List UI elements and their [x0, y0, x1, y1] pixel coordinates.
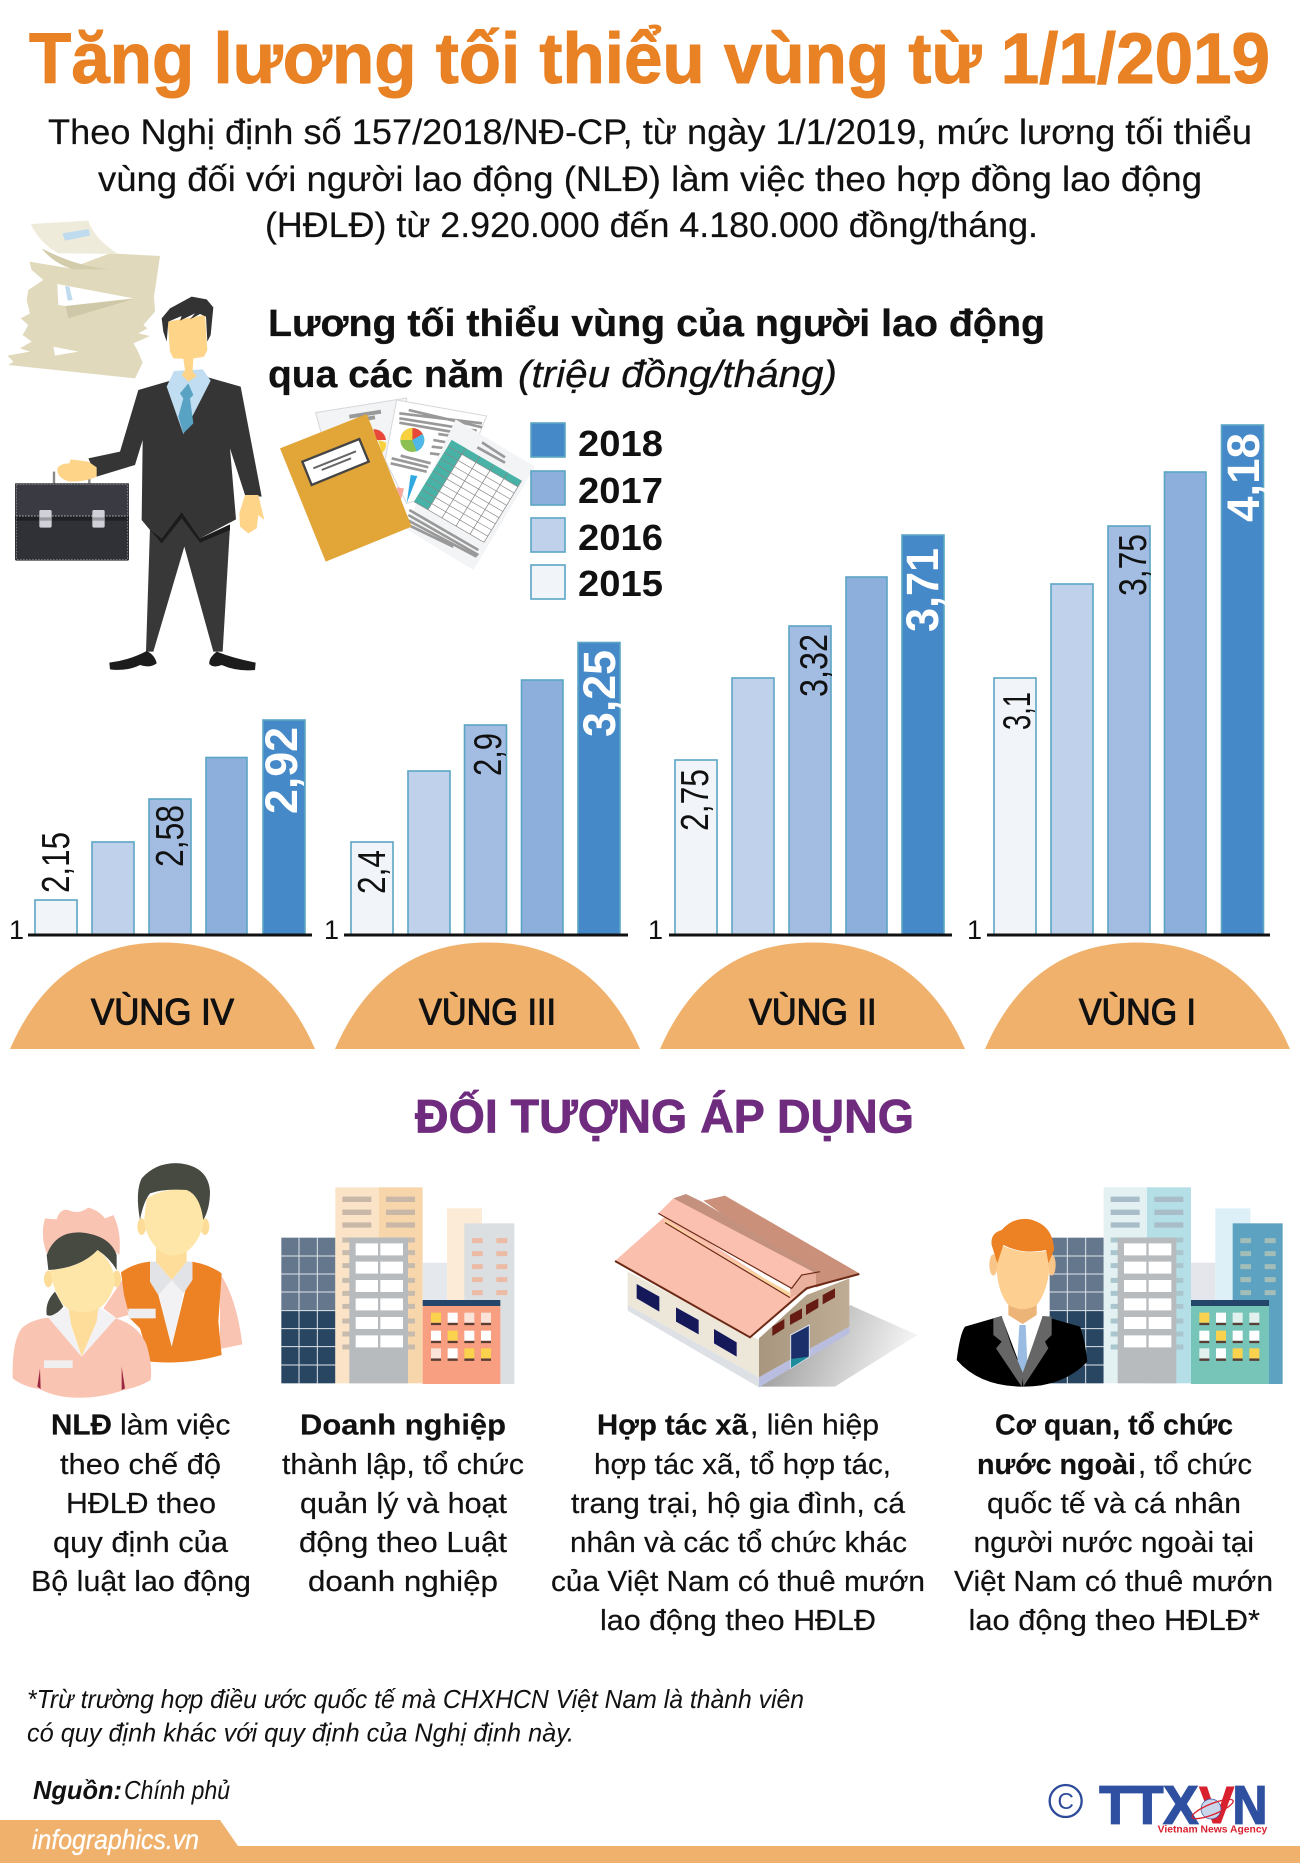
region dome: Vùng I [985, 942, 1290, 1049]
buildings [1050, 1187, 1283, 1384]
icon: foreign businessman and buildings [957, 1187, 1283, 1387]
bar chart: Vùng IV: 2,58 [149, 805, 192, 867]
legend item 2018: 2018 [578, 423, 663, 464]
footnote [27, 1684, 804, 1748]
footnote: có quy định khác với quy định của Nghị định này. [27, 1718, 574, 1748]
logo: TTXVN: V [1198, 1775, 1235, 1835]
text block: Cơ quan, tổ chức nước ngoài: , tổ chức [1138, 1449, 1252, 1481]
text block: Cơ quan, tổ chức nước ngoài: Việt Nam có thuê mướn [954, 1566, 1273, 1598]
legend item 2017 [531, 470, 663, 511]
region dome: Vùng IV [10, 942, 315, 1049]
text block: Hợp tác xã: trang trại, hộ gia đình, cá [571, 1488, 906, 1520]
page with table [405, 419, 535, 570]
worker: man [103, 1163, 242, 1362]
region dome: Vùng II: VÙNG II [749, 992, 876, 1033]
man: shoes [109, 651, 256, 670]
text block: NLĐ: theo chế độ [60, 1449, 221, 1481]
region dome: Vùng III [335, 942, 640, 1049]
text block: Hợp tác xã: nhân và các tổ chức khác [570, 1527, 907, 1559]
text block: Hợp tác xã: của Việt Nam có thuê mướn [551, 1566, 925, 1598]
chart heading: qua các năm [268, 354, 504, 396]
bar chart: Vùng IV: 2,92 [256, 727, 307, 814]
intro text block: Theo Nghị định số 157/2018/NĐ-CP, từ ngày 1/1/2019, mức lương tối thiểu [48, 113, 1252, 152]
text block: Hợp tác xã: hợp tác xã, tổ hợp tác, [594, 1449, 891, 1481]
bar chart: Vùng II: 3,32 [793, 634, 836, 697]
worker: woman [13, 1208, 151, 1398]
text block: NLĐ: làm việc [120, 1409, 230, 1441]
intro text block: (HĐLĐ) từ 2.920.000 đến 4.180.000 đồng/tháng. [265, 206, 1038, 245]
text block: Hợp tác xã: lao động theo HĐLĐ [600, 1605, 876, 1637]
man: tie [178, 383, 193, 433]
bar chart: Vùng I: 1 [967, 915, 982, 945]
legend item 2016: 2016 [578, 517, 663, 558]
partial pie behind folder [373, 429, 386, 440]
man: hair [162, 297, 213, 342]
bar chart: Vùng IV [9, 720, 312, 945]
text block: NLĐ: quy định của [53, 1527, 229, 1559]
man: jacket [88, 376, 262, 538]
text block: Hợp tác xã: Hợp tác xã [597, 1409, 749, 1441]
text block: Cơ quan, tổ chức nước ngoài: người nước ngoài tại [974, 1527, 1254, 1559]
legend item 2016 [531, 517, 663, 558]
text block: Cơ quan, tổ chức nước ngoài: quốc tế và cá nhân [987, 1488, 1241, 1520]
logo: TTXVN [1050, 1775, 1268, 1836]
footnote: *Trừ trường hợp điều ước quốc tế mà CHXHCN Việt Nam là thành viên [27, 1684, 804, 1714]
icon: city buildings [281, 1187, 514, 1384]
man: right hand [239, 495, 264, 533]
section heading: ĐỐI TƯỢNG ÁP DỤNG [415, 1090, 914, 1142]
logo globe [1190, 1796, 1235, 1822]
chart heading [268, 303, 1045, 396]
region dome: Vùng I: VÙNG I [1079, 992, 1196, 1033]
text block: Cơ quan, tổ chức nước ngoài: lao động theo HĐLĐ* [968, 1605, 1260, 1637]
intro text block: vùng đối với người lao động (NLĐ) làm việc theo hợp đồng lao động [98, 160, 1202, 199]
orange folder [280, 414, 412, 562]
illustration: businessman with briefcase [15, 297, 264, 670]
bar chart: Vùng II: 3,71 [897, 548, 948, 632]
legend item 2015: 2015 [578, 563, 663, 604]
man: collar [167, 369, 211, 434]
source: Chính phủ [124, 1775, 230, 1805]
text block: Doanh nghiệp: thành lập, tổ chức [282, 1449, 524, 1481]
bar chart: Vùng III: 2,4 [351, 850, 394, 894]
bar chart: Vùng I: 4,18 [1218, 433, 1269, 522]
bar chart: Vùng II [648, 535, 952, 945]
man: left hand [57, 459, 97, 482]
chart heading: Lương tối thiểu vùng của người lao động [268, 303, 1045, 345]
legend item 2017: 2017 [578, 470, 663, 511]
bar chart: Vùng III: 2,9 [467, 733, 510, 776]
briefcase [15, 472, 129, 561]
man: neck [182, 358, 197, 382]
text block: Doanh nghiệp [282, 1409, 524, 1598]
source: Nguồn: [33, 1775, 122, 1805]
copyright mark [1050, 1785, 1082, 1817]
region dome: Vùng IV: VÙNG IV [91, 992, 234, 1033]
source [33, 1775, 230, 1805]
pie chart [400, 428, 424, 452]
text block: Doanh nghiệp: doanh nghiệp [308, 1566, 498, 1598]
footer bar: infographics.vn [32, 1824, 199, 1855]
icon: workers [13, 1163, 242, 1398]
bar chart: Vùng I: 3,1 [996, 692, 1039, 730]
text block: Cơ quan, tổ chức nước ngoài: Cơ quan, tổ chức [995, 1409, 1233, 1441]
region dome: Vùng III: VÙNG III [419, 992, 556, 1033]
text block: Doanh nghiệp: quản lý và hoạt [300, 1488, 507, 1520]
bar chart: Vùng IV: 2,15 [35, 832, 78, 893]
legend item 2015 [531, 563, 663, 604]
bar chart: Vùng II: 1 [648, 915, 663, 945]
chart heading: (triệu đồng/tháng) [518, 354, 837, 396]
text block: Doanh nghiệp: động theo Luật [299, 1527, 507, 1559]
text block: Hợp tác xã [551, 1409, 925, 1637]
text block: Cơ quan, tổ chức nước ngoài [954, 1409, 1273, 1637]
bar chart: Vùng III: 3,25 [574, 650, 625, 737]
text block: Hợp tác xã: , liên hiệp [750, 1409, 879, 1441]
logo: TTXVN: Vietnam News Agency [1158, 1825, 1268, 1836]
legend [531, 423, 663, 604]
bar chart: Vùng II: 2,75 [674, 769, 717, 831]
icon: paper stack [7, 221, 160, 378]
text block: NLĐ: Bộ luật lao động [31, 1566, 251, 1598]
icon: documents and folder [280, 398, 535, 570]
title: Tăng lương tối thiểu vùng từ 1/1/2019 [29, 20, 1270, 99]
businessman bust [957, 1219, 1087, 1387]
region dome: Vùng II [660, 942, 965, 1049]
text block: Doanh nghiệp: Doanh nghiệp [300, 1409, 506, 1441]
legend item 2018 [531, 423, 663, 464]
icon: cooperative factory [615, 1194, 917, 1387]
logo: TTXVN: N [1233, 1775, 1267, 1835]
intro text block [48, 113, 1252, 245]
bar chart: Vùng IV: 1 [9, 915, 24, 945]
bar chart: Vùng III: 1 [324, 915, 339, 945]
text block: NLĐ: NLĐ [51, 1409, 112, 1441]
man: face [168, 315, 207, 359]
text block: NLĐ: HĐLĐ theo [66, 1488, 216, 1520]
bar chart: Vùng I: 3,75 [1112, 534, 1155, 596]
copyright mark: C [1057, 1788, 1074, 1814]
bar chart: Vùng III [324, 642, 628, 945]
text block: NLĐ [31, 1409, 251, 1598]
bar chart: Vùng I [967, 425, 1270, 945]
logo: TTXVN: TTX [1099, 1775, 1198, 1835]
man: trousers [146, 512, 230, 652]
footer bar [0, 1820, 1300, 1863]
text block: Cơ quan, tổ chức nước ngoài: nước ngoài [977, 1449, 1136, 1481]
